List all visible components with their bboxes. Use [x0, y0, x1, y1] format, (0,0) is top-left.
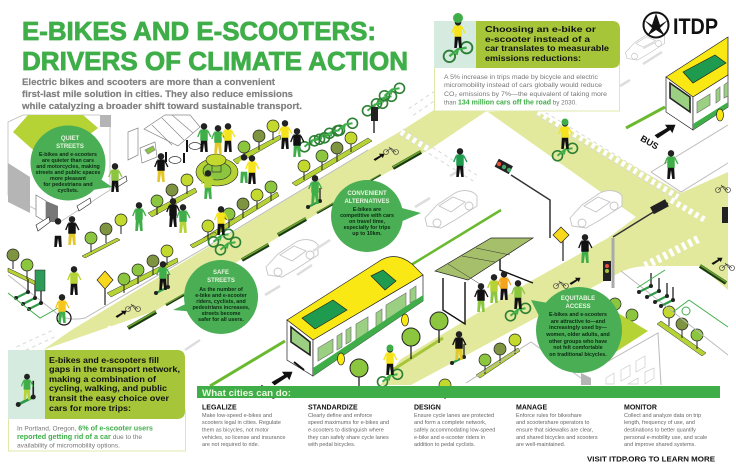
- callout heading: making a combination of: [49, 374, 156, 384]
- callout: gaps in the transport network: [8, 350, 186, 451]
- column: legalize: scooters legal in cities. Regulate: [202, 420, 281, 426]
- column: legalize: [202, 404, 285, 448]
- bubble: quiet streets: more pleasant: [50, 176, 86, 182]
- bubble: convenient alternatives: especially for trips: [344, 225, 390, 231]
- subtitle: [21, 77, 302, 112]
- cars: [266, 32, 664, 277]
- column: manage: ensure that sidewalks are clear,: [516, 428, 594, 434]
- person in wheelchair: [56, 294, 71, 325]
- bubble: convenient alternatives: competitive with cars: [340, 213, 394, 219]
- callout body: availability of micromobility options.: [17, 442, 120, 450]
- callout body: than 134 million cars off the road by 2030.: [444, 100, 577, 106]
- column: legalize: them as bicycles, not motor: [202, 428, 269, 434]
- callout heading: [485, 24, 609, 63]
- column: design: Ensure cycle lanes are protected: [414, 413, 494, 419]
- column: standardize: Clearly define and enforce: [308, 413, 372, 419]
- column: manage: are well-maintained.: [516, 442, 566, 448]
- people: [52, 120, 678, 312]
- curbs: [8, 125, 728, 385]
- panel: what cities can do: [197, 386, 720, 448]
- column: standardize: with pedal bicycles.: [307, 442, 356, 448]
- column: manage: Enforce rules for bikeshare: [516, 413, 582, 419]
- callout heading: E-bikes and e-scooters fill: [49, 355, 159, 365]
- callout heading: Choosing an e-bike or: [485, 24, 597, 34]
- bubble: quiet streets: are quieter than cars: [42, 158, 94, 164]
- scooter riders: [154, 175, 466, 365]
- icon: cyclist with helmet: [444, 13, 472, 62]
- bubble: convenient alternatives: ALTERNATIVES: [344, 199, 390, 205]
- bubble: safe streets: STREETS: [207, 278, 235, 284]
- column: standardize: [307, 404, 389, 448]
- callout body: reported getting rid of a car due to the: [17, 432, 142, 441]
- callout heading: emissions reductions:: [485, 53, 581, 63]
- bubble: equitable access: ACCESS: [565, 304, 591, 310]
- bubble: equitable access: EQUITABLE: [561, 296, 595, 302]
- bubble: equitable access: women, older adults, and: [545, 332, 610, 338]
- bubble: safe streets: pedestrians increases,: [192, 305, 250, 311]
- subtitle: Electric bikes and scooters are more than a convenient: [22, 77, 276, 88]
- bubble: quiet streets: streets and public spaces: [36, 170, 100, 176]
- column: manage: and shared bicycles and scooters: [516, 435, 598, 441]
- scooter parking: [8, 270, 728, 327]
- column: standardize: e-scooters to distinguish where: [308, 428, 384, 434]
- column: monitor: personal e-mobility use, and scale: [624, 435, 707, 441]
- column: manage: [516, 404, 598, 448]
- column: manage: MANAGE: [516, 404, 547, 412]
- title: [22, 18, 408, 76]
- bubble: quiet streets: for pedestrians and: [43, 182, 93, 188]
- bubble: safe streets: [173, 260, 258, 334]
- bubble: safe streets: As the number of: [199, 287, 243, 293]
- bubble: convenient alternatives: CONVENIENT: [347, 191, 387, 197]
- column: standardize: speed maximums for e-bikes and: [308, 420, 389, 426]
- subtitle: first-last mile solution in cities. They also reduce emissions: [22, 89, 293, 100]
- column: monitor: [624, 404, 707, 448]
- building: bottom right: [581, 313, 654, 385]
- column: monitor: destinations to better quantify: [624, 428, 696, 434]
- column: legalize: are not required to ride.: [202, 442, 260, 448]
- bus lane arrow: bottom: [257, 372, 292, 401]
- bike parking racks: [300, 83, 404, 152]
- callout body: micromobility instead of cars globally would reduce: [444, 82, 603, 89]
- dark lane separators: [128, 151, 726, 328]
- callout body: A 5% increase in trips made by bicycle and electric: [444, 74, 598, 81]
- bubble: equitable access: not felt comfortable: [553, 345, 603, 351]
- column: standardize: STANDARDIZE: [308, 404, 358, 412]
- large street trees: [350, 312, 448, 390]
- column: design: safely accommodating low-speed: [414, 428, 495, 434]
- bubble: safe streets: safer for all users.: [198, 317, 244, 323]
- bubble: convenient alternatives: E-bikes are: [353, 207, 381, 213]
- bubble: equitable access: E-bikes and e-scooters: [549, 312, 607, 318]
- column: design: and form a complete network,: [414, 420, 487, 426]
- callout body: [444, 74, 608, 106]
- bubble: safe streets: SAFE: [213, 270, 229, 276]
- traffic lights: [371, 107, 728, 288]
- green lane stripes: [210, 107, 665, 386]
- column: design: DESIGN: [414, 404, 441, 412]
- bubble: convenient alternatives: up to 10km.: [352, 231, 382, 237]
- bubble: convenient alternatives: on travel time,: [349, 219, 385, 225]
- bubble: quiet streets: STREETS: [56, 144, 84, 150]
- callout heading: cars for more trips:: [49, 403, 131, 413]
- callout heading: e-scooter instead of a: [485, 34, 590, 44]
- column: legalize: vehicles, so license and insurance: [202, 435, 285, 441]
- bubble: equitable access: [531, 287, 622, 373]
- bubble: quiet streets: and motorcycles, making: [36, 164, 100, 170]
- top right bus: [666, 37, 728, 130]
- heading: What cities can do:: [202, 388, 291, 398]
- bubble: safe streets: e-bike and e-scooter: [195, 293, 247, 299]
- callout: measurable emissions reductions: [434, 13, 620, 111]
- logo: ITDP: ITDP: [673, 14, 718, 39]
- bubble: equitable access: increasingly used by—: [549, 325, 608, 331]
- bubble: equitable access: other groups who have: [549, 339, 607, 345]
- bike lane: cross street and right junction: [380, 110, 728, 385]
- bus lane label: top: [639, 125, 676, 151]
- building: plaza shade structure: [128, 115, 200, 163]
- bike lane: long diagonal: [43, 110, 488, 350]
- callout body: CO₂ emissions by 7%—the equivalent of taking more: [444, 91, 608, 98]
- bubble: equitable access: on traditional bicycles.: [549, 352, 607, 358]
- column: design: addition to pedal cyclists.: [414, 442, 476, 448]
- column: legalize: LEGALIZE: [202, 404, 237, 412]
- cyclists: [208, 118, 578, 387]
- callout heading: [49, 355, 180, 413]
- logo: ITDP: [644, 12, 718, 39]
- column: monitor: length, frequency of use, and: [624, 420, 695, 426]
- bus lane label: top: BUS: [639, 133, 660, 151]
- column: design: e-bike and e-scooter riders in: [414, 435, 485, 441]
- column: monitor: MONITOR: [624, 404, 657, 412]
- centre bus: [287, 256, 423, 376]
- bubble: safe streets: riders, cyclists, and: [196, 299, 246, 305]
- bus shelter: [435, 238, 533, 324]
- lane bike icons and arrows: [116, 147, 734, 318]
- title: E-BIKES AND E-SCOOTERS:: [22, 18, 376, 46]
- bubble: convenient alternatives: [331, 180, 421, 252]
- column: monitor: Collect and analyze data on trip: [624, 413, 701, 419]
- title: DRIVERS OF CLIMATE ACTION: [22, 48, 408, 76]
- callout body: [17, 424, 153, 450]
- call to action: VISIT ITDP.ORG TO LEARN MORE: [587, 454, 715, 464]
- planters with trees: [7, 120, 706, 399]
- bubble: quiet streets: [30, 126, 112, 200]
- callout heading: gaps in the transport network,: [49, 364, 180, 374]
- road dash marks: [185, 42, 662, 350]
- callout heading: transit the easy choice over: [49, 393, 170, 403]
- column: legalize: Make low-speed e-bikes and: [202, 413, 272, 419]
- callout heading: car translates to measurable: [485, 43, 609, 53]
- street scene illustration: [7, 32, 734, 401]
- callout heading: cycling, walking, and public: [49, 383, 167, 393]
- crosswalks: [18, 95, 705, 350]
- bubble: quiet streets: E-bikes and e-scooters: [39, 152, 97, 158]
- column: manage: and scootershare operators to: [516, 420, 589, 426]
- icon: scooter rider: [16, 374, 36, 407]
- warning signs: [97, 227, 569, 305]
- column: monitor: and improve shared systems.: [624, 442, 696, 448]
- plaza benches and tables: [36, 140, 201, 231]
- bubble: quiet streets: cyclists.: [58, 188, 79, 194]
- column: standardize: they can safely share cycle lanes: [308, 435, 389, 441]
- building: top left: [8, 115, 111, 222]
- bubble: quiet streets: QUIET: [61, 136, 79, 142]
- subtitle: while catalyzing a broader shift toward sustainable transport.: [21, 101, 302, 112]
- callout body: In Portland, Oregon, 6% of e-scooter users: [17, 424, 153, 432]
- bubble: safe streets: streets become: [202, 311, 240, 317]
- bubble: equitable access: are attractive to—and: [551, 319, 605, 325]
- bus lane arrow: bottom: BUS: [257, 383, 278, 401]
- column: design: [414, 404, 495, 448]
- fountain: [196, 154, 238, 186]
